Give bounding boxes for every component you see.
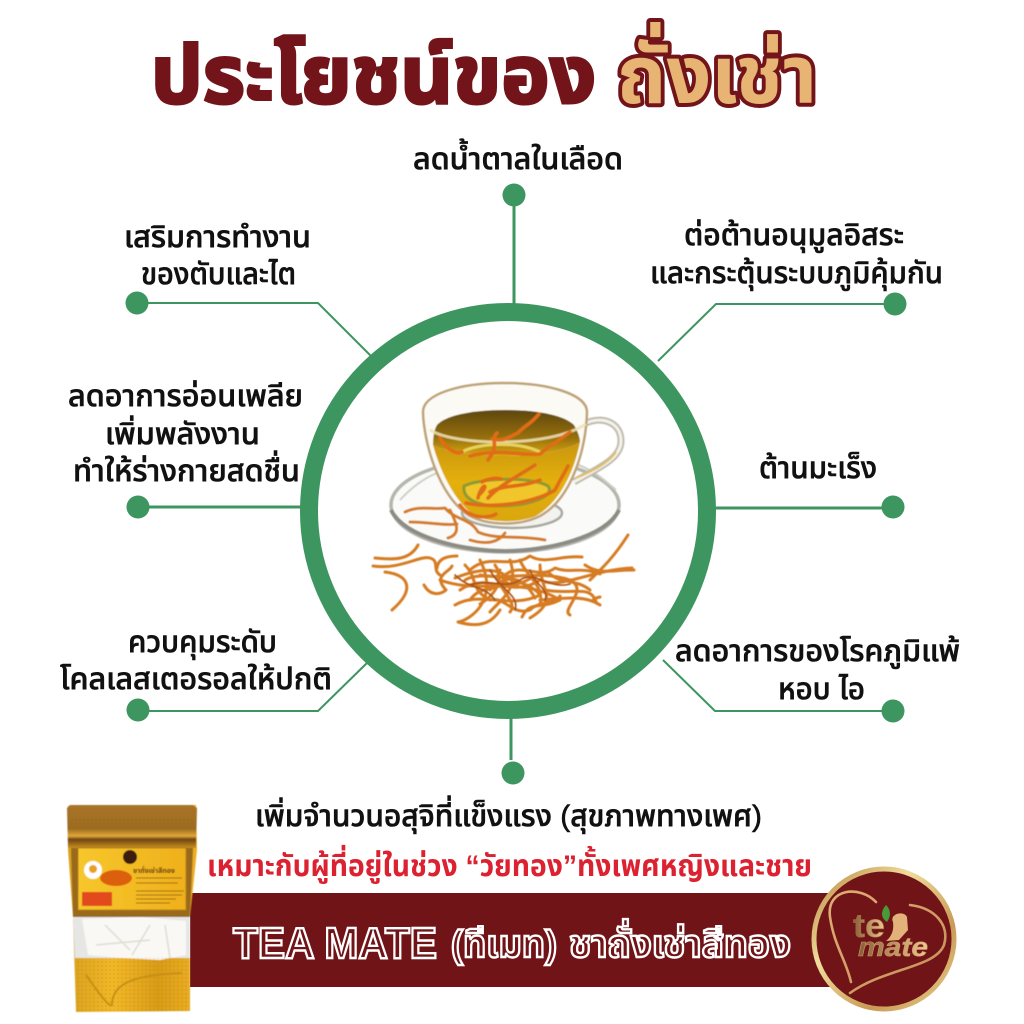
pouch body: [68, 805, 197, 1012]
title: [151, 22, 817, 121]
pouch label: [78, 848, 186, 910]
label: fatigue and energy: ลดอาการอ่อนเพลีย: [68, 380, 303, 413]
banner text: (ทีเมท): [451, 924, 557, 966]
banner background: [190, 893, 830, 987]
cordyceps in tea: [440, 414, 570, 517]
label: liver and kidney: [124, 221, 311, 291]
label: cholesterol: ควบคุมระดับ: [128, 626, 277, 660]
connector: upper right: [658, 292, 906, 361]
logo wording: mate: [858, 932, 928, 962]
title: benefits of: ประโยชน์ของ: [151, 31, 596, 121]
banner text: TEA MATE: [233, 919, 437, 968]
banner text: [233, 918, 791, 968]
connector: middle left: [126, 496, 302, 518]
label: cholesterol: โคลเลสเตอรอลให้ปกติ: [60, 663, 332, 696]
product pouch: [67, 805, 197, 1012]
green ring: [309, 312, 707, 710]
label: sperm count: เพิ่มจำนวนอสุจิที่แข็งแรง (สุขภาพทางเพศ): [255, 795, 762, 834]
label: allergy: หอบ ไอ: [778, 673, 865, 706]
label: liver and kidney: เสริมการทำงาน: [124, 221, 311, 254]
title: cordyceps highlighted: ถั่งเช่า: [617, 22, 817, 121]
connector: upper left: [126, 292, 371, 356]
cordyceps on saucer and table: [373, 508, 634, 625]
label: cholesterol: [60, 626, 332, 696]
label: antioxidant and immunity: [650, 219, 943, 291]
logo wording: te: [853, 907, 885, 944]
pouch top seal: [67, 805, 197, 848]
label: antioxidant and immunity: และกระตุ้นระบบภูมิคุ้มกัน: [650, 257, 943, 291]
badge disc: [814, 869, 954, 1009]
banner text: ชาถั่งเช่าสีทอง: [569, 918, 791, 966]
label: allergy: [675, 635, 960, 706]
logo wording: [853, 907, 928, 962]
label: liver and kidney: ของตับและไต: [141, 258, 296, 291]
label: fatigue and energy: เพิ่มพลังงาน: [105, 415, 260, 451]
label: lowers blood sugar: ลดน้ำตาลในเลือด: [413, 138, 623, 176]
cup handle: [574, 420, 621, 482]
tea cup illustration: [373, 383, 634, 625]
connector: bottom: [502, 716, 524, 784]
connector: lower right: [663, 660, 904, 722]
tea: [430, 410, 586, 521]
product pouch: ชาถั่งเช่าสีทอง: [133, 865, 175, 875]
connector: middle right: [716, 496, 904, 518]
label: antioxidant and immunity: ต่อต้านอนุมูลอิสระ: [684, 219, 904, 253]
connector: lower left: [126, 662, 368, 722]
heart outline: [830, 892, 945, 993]
pouch bottom dots and crease: [75, 958, 190, 1011]
saucer: [391, 458, 619, 552]
leaf: [882, 905, 890, 922]
label: fatigue and energy: ทำให้ร่างกายสดชื่น: [73, 450, 300, 488]
tea mate logo badge: [814, 869, 954, 1009]
connector: top: [502, 184, 526, 304]
cup body: [423, 383, 587, 524]
product banner: [190, 893, 830, 987]
label: anti cancer: ต้านมะเร็ง: [759, 452, 877, 485]
connector lines and dots: [126, 184, 906, 784]
teapot: [886, 913, 908, 941]
label: fatigue and energy: [68, 380, 303, 488]
label: allergy: ลดอาการของโรคภูมิแพ้: [675, 635, 960, 669]
brown band: [71, 848, 193, 917]
pouch window: [73, 917, 190, 958]
red audience statement: เหมาะกับผู้ที่อยู่ในช่วง “วัยทอง”ทั้งเพศหญิงและชาย: [207, 844, 812, 884]
